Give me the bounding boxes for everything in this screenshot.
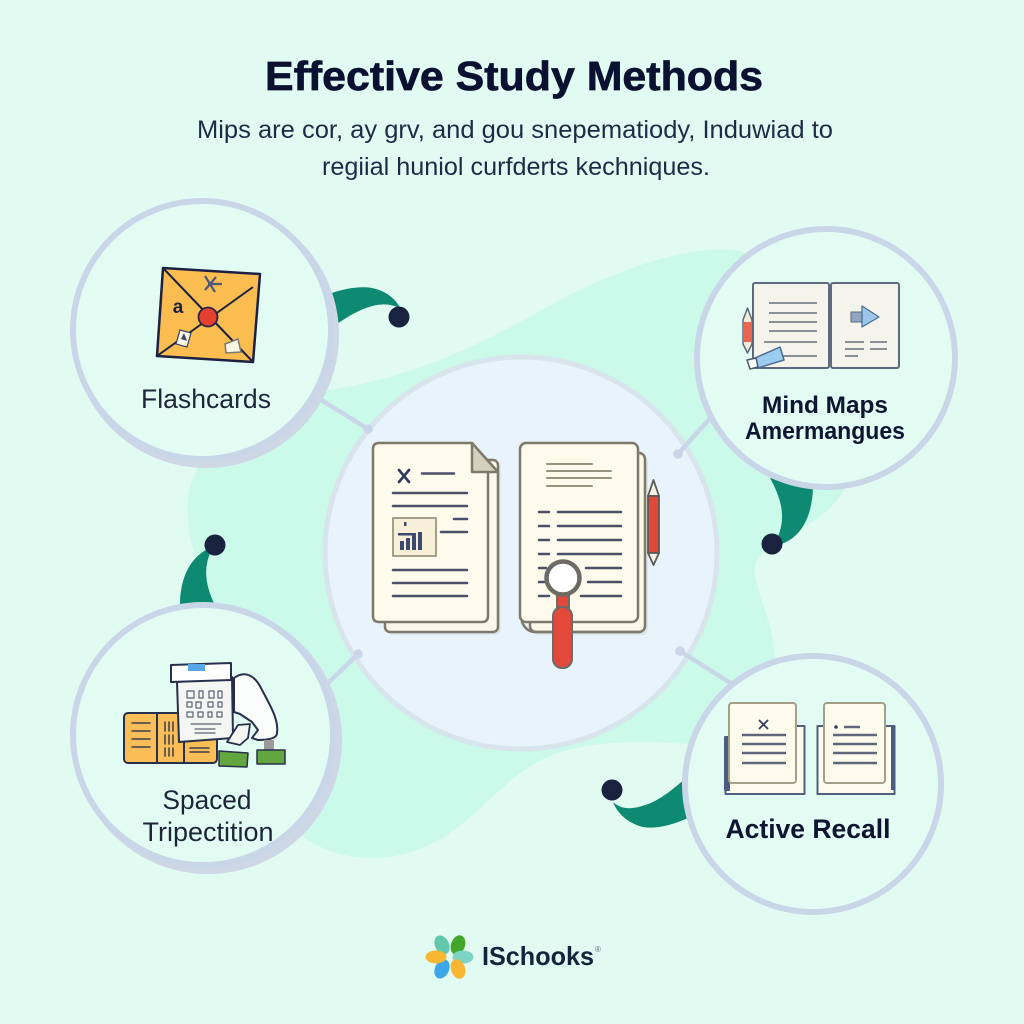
icon: right card xyxy=(818,703,895,794)
connector: active recall to center xyxy=(675,646,732,684)
logo wordmark: ISchooks xyxy=(482,941,594,971)
connector: spaced repetition to center xyxy=(326,649,363,685)
node: flashcards xyxy=(73,201,410,464)
label xyxy=(745,392,905,445)
connector: flashcards to center xyxy=(318,398,373,434)
subtitle xyxy=(197,116,833,181)
circle xyxy=(73,605,338,870)
icon: open notebook xyxy=(743,283,899,369)
label: Spaced xyxy=(162,785,252,815)
icon: flashcard envelope xyxy=(157,268,260,362)
label xyxy=(142,785,274,847)
central illustration: documents and magnifier xyxy=(373,443,659,668)
node: active recall xyxy=(602,656,941,912)
circle xyxy=(685,656,941,912)
title: Effective Study Methods xyxy=(265,53,763,99)
node: spaced repetition xyxy=(73,534,338,870)
swoosh and dot xyxy=(180,534,226,605)
registered mark: ® xyxy=(595,945,601,954)
subtitle: Mips are cor, ay grv, and gou snepematiody, Induwiad to xyxy=(197,116,833,144)
central circle xyxy=(325,357,717,749)
label: Tripectition xyxy=(142,817,274,847)
swoosh and dot xyxy=(326,287,410,329)
logo xyxy=(426,933,601,981)
node: mind maps xyxy=(697,229,955,554)
icon: left card xyxy=(725,703,804,794)
icon: flashcard envelope: a xyxy=(173,297,184,318)
left document xyxy=(373,443,501,635)
label: Mind Maps xyxy=(762,392,888,419)
pencil xyxy=(648,480,659,565)
label: Active Recall xyxy=(726,814,890,844)
background blob xyxy=(188,249,851,858)
magnifier xyxy=(546,562,580,668)
swoosh and dot xyxy=(762,478,813,554)
label: Flashcards xyxy=(141,384,271,414)
swoosh and dot xyxy=(602,778,688,828)
right document xyxy=(520,443,648,635)
circle xyxy=(697,229,955,487)
circle xyxy=(73,201,335,464)
icon: study stack and schedule xyxy=(124,663,285,767)
label: Amermangues xyxy=(745,418,905,445)
subtitle: regiial huniol curfderts kechniques. xyxy=(322,153,710,181)
connector: mind maps to center xyxy=(673,416,712,459)
logo flower xyxy=(426,933,474,981)
